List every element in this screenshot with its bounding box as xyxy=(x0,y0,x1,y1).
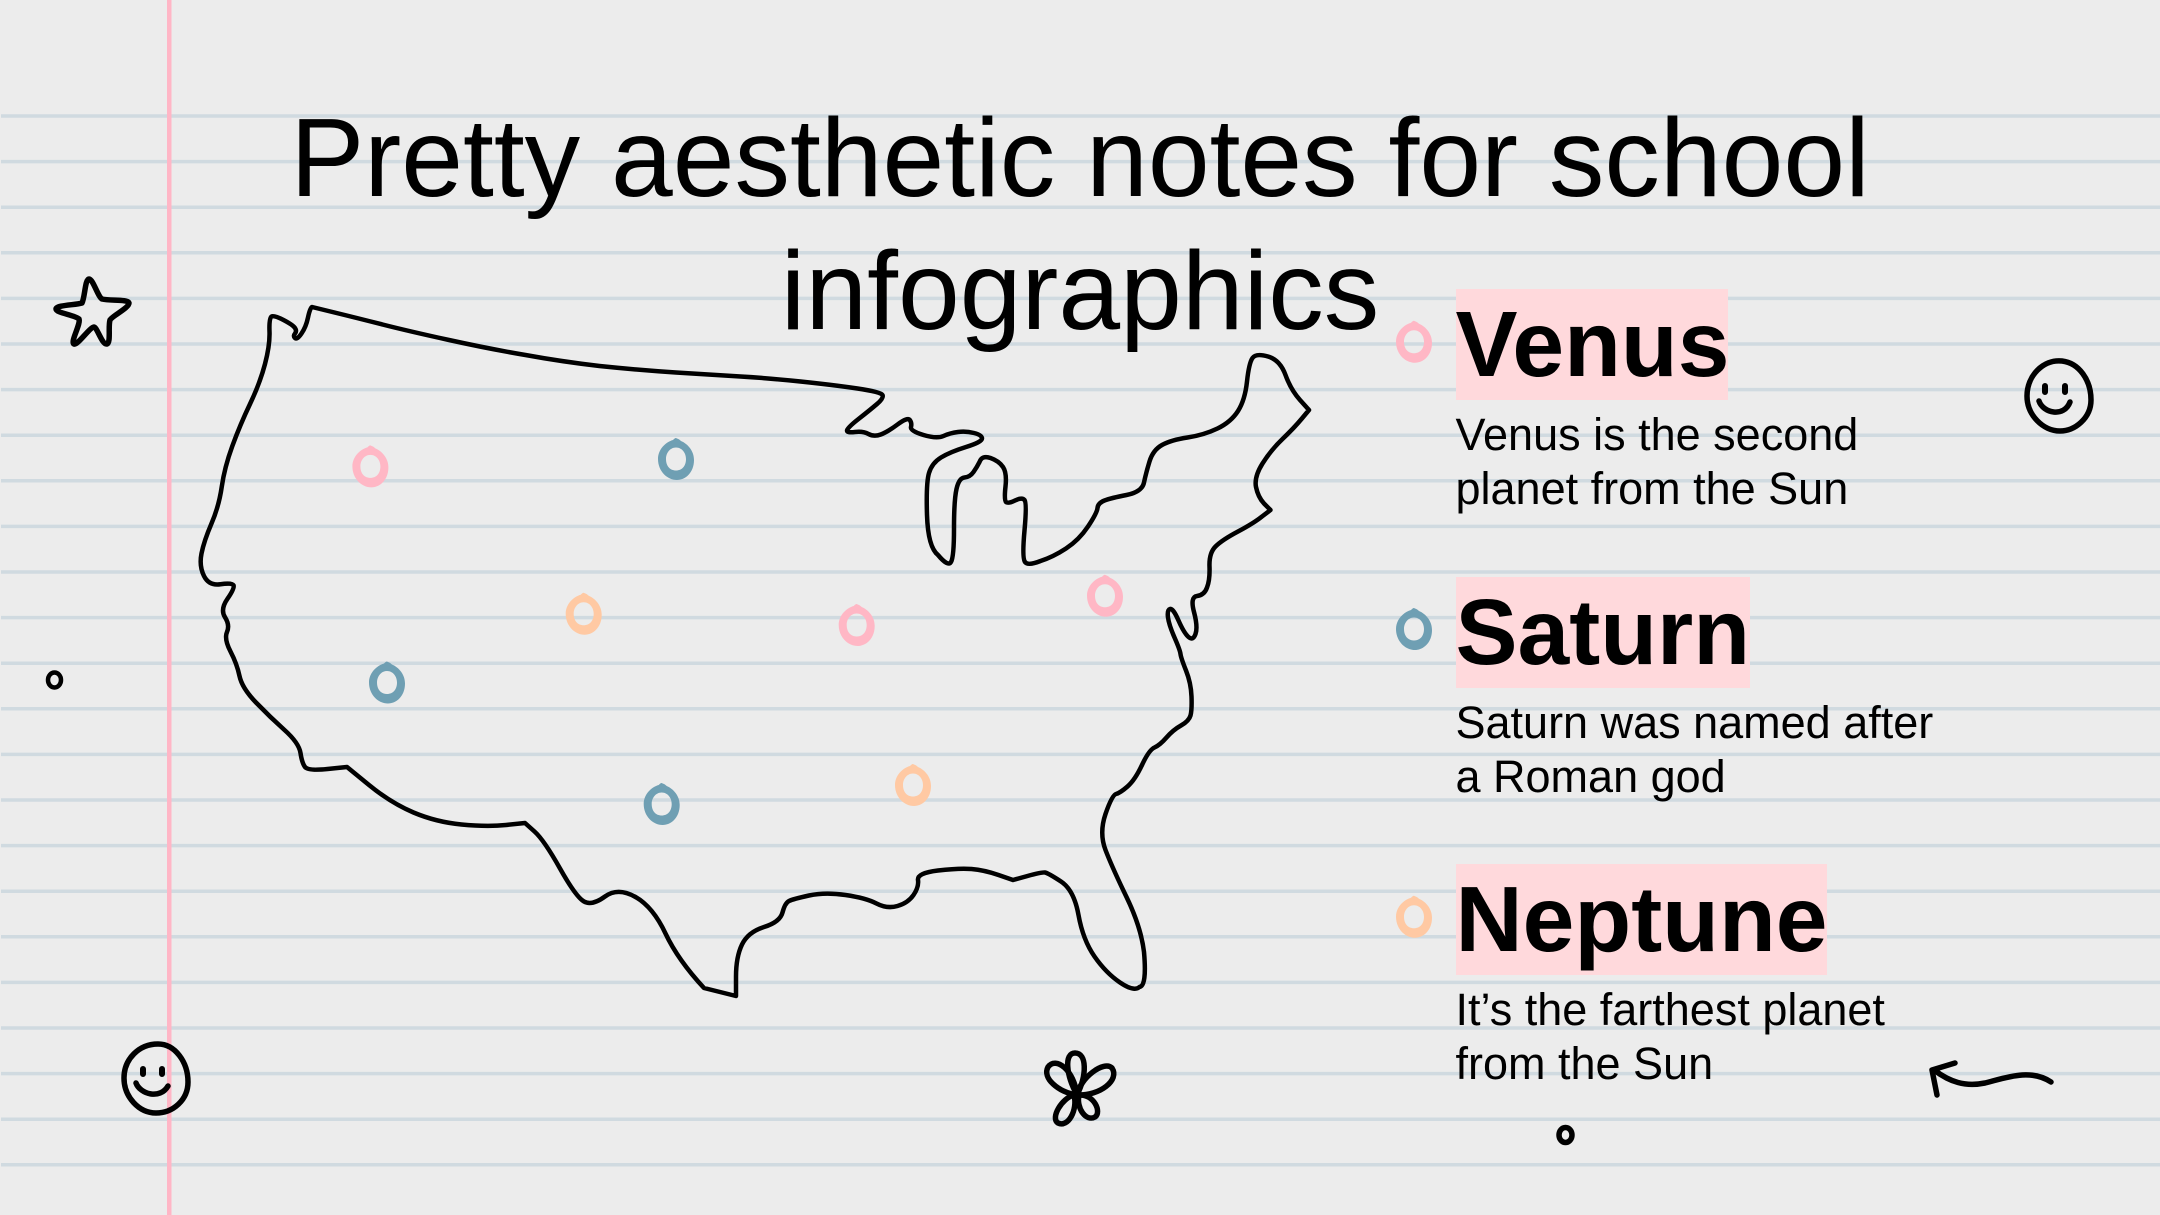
icon: small circle doodle, left xyxy=(48,672,61,688)
arrow: hand-drawn pointing left xyxy=(1932,1063,2051,1095)
icon: smiley, top right xyxy=(2027,361,2091,431)
icon: smiley, bottom left xyxy=(124,1044,188,1113)
text: Saturn description: a Roman god xyxy=(1456,751,1726,802)
text: Neptune description: It’s the farthest planet xyxy=(1456,984,1885,1034)
map marker: blue, south xyxy=(644,783,680,825)
map marker: pink, northeast xyxy=(1087,575,1123,617)
heading: Saturn: Saturn xyxy=(1456,580,1750,684)
title: Pretty aesthetic notes for school xyxy=(290,96,1870,220)
legend marker: Venus pink xyxy=(1396,321,1432,363)
text: Venus description xyxy=(1456,409,1858,514)
map marker: blue, north xyxy=(658,438,694,480)
text: Saturn description xyxy=(1456,697,1933,802)
icon: small circle doodle, bottom xyxy=(1559,1128,1572,1142)
map marker: blue, southwest xyxy=(369,662,405,704)
heading: Neptune: Neptune xyxy=(1456,867,1828,971)
title: infographics xyxy=(781,229,1379,353)
text: Venus description: Venus is the second xyxy=(1456,409,1858,460)
map: outline of the USA xyxy=(201,307,1309,996)
text: Neptune description: from the Sun xyxy=(1456,1038,1713,1088)
text: Venus description: planet from the Sun xyxy=(1456,463,1848,514)
title xyxy=(290,96,1870,353)
map marker: pink, center xyxy=(839,604,875,646)
icon: star doodle xyxy=(56,279,129,344)
text: Saturn description: Saturn was named after xyxy=(1456,697,1933,748)
map marker: pink, northwest xyxy=(352,445,388,487)
heading: Venus: Venus xyxy=(1456,292,1729,396)
map marker: peach, southeast xyxy=(895,764,931,806)
legend marker: Neptune peach xyxy=(1396,896,1432,938)
legend marker: Saturn blue xyxy=(1396,608,1432,650)
map marker: peach, center west xyxy=(566,593,602,635)
icon: flower doodle xyxy=(1047,1053,1114,1124)
text: Neptune description xyxy=(1456,984,1885,1088)
